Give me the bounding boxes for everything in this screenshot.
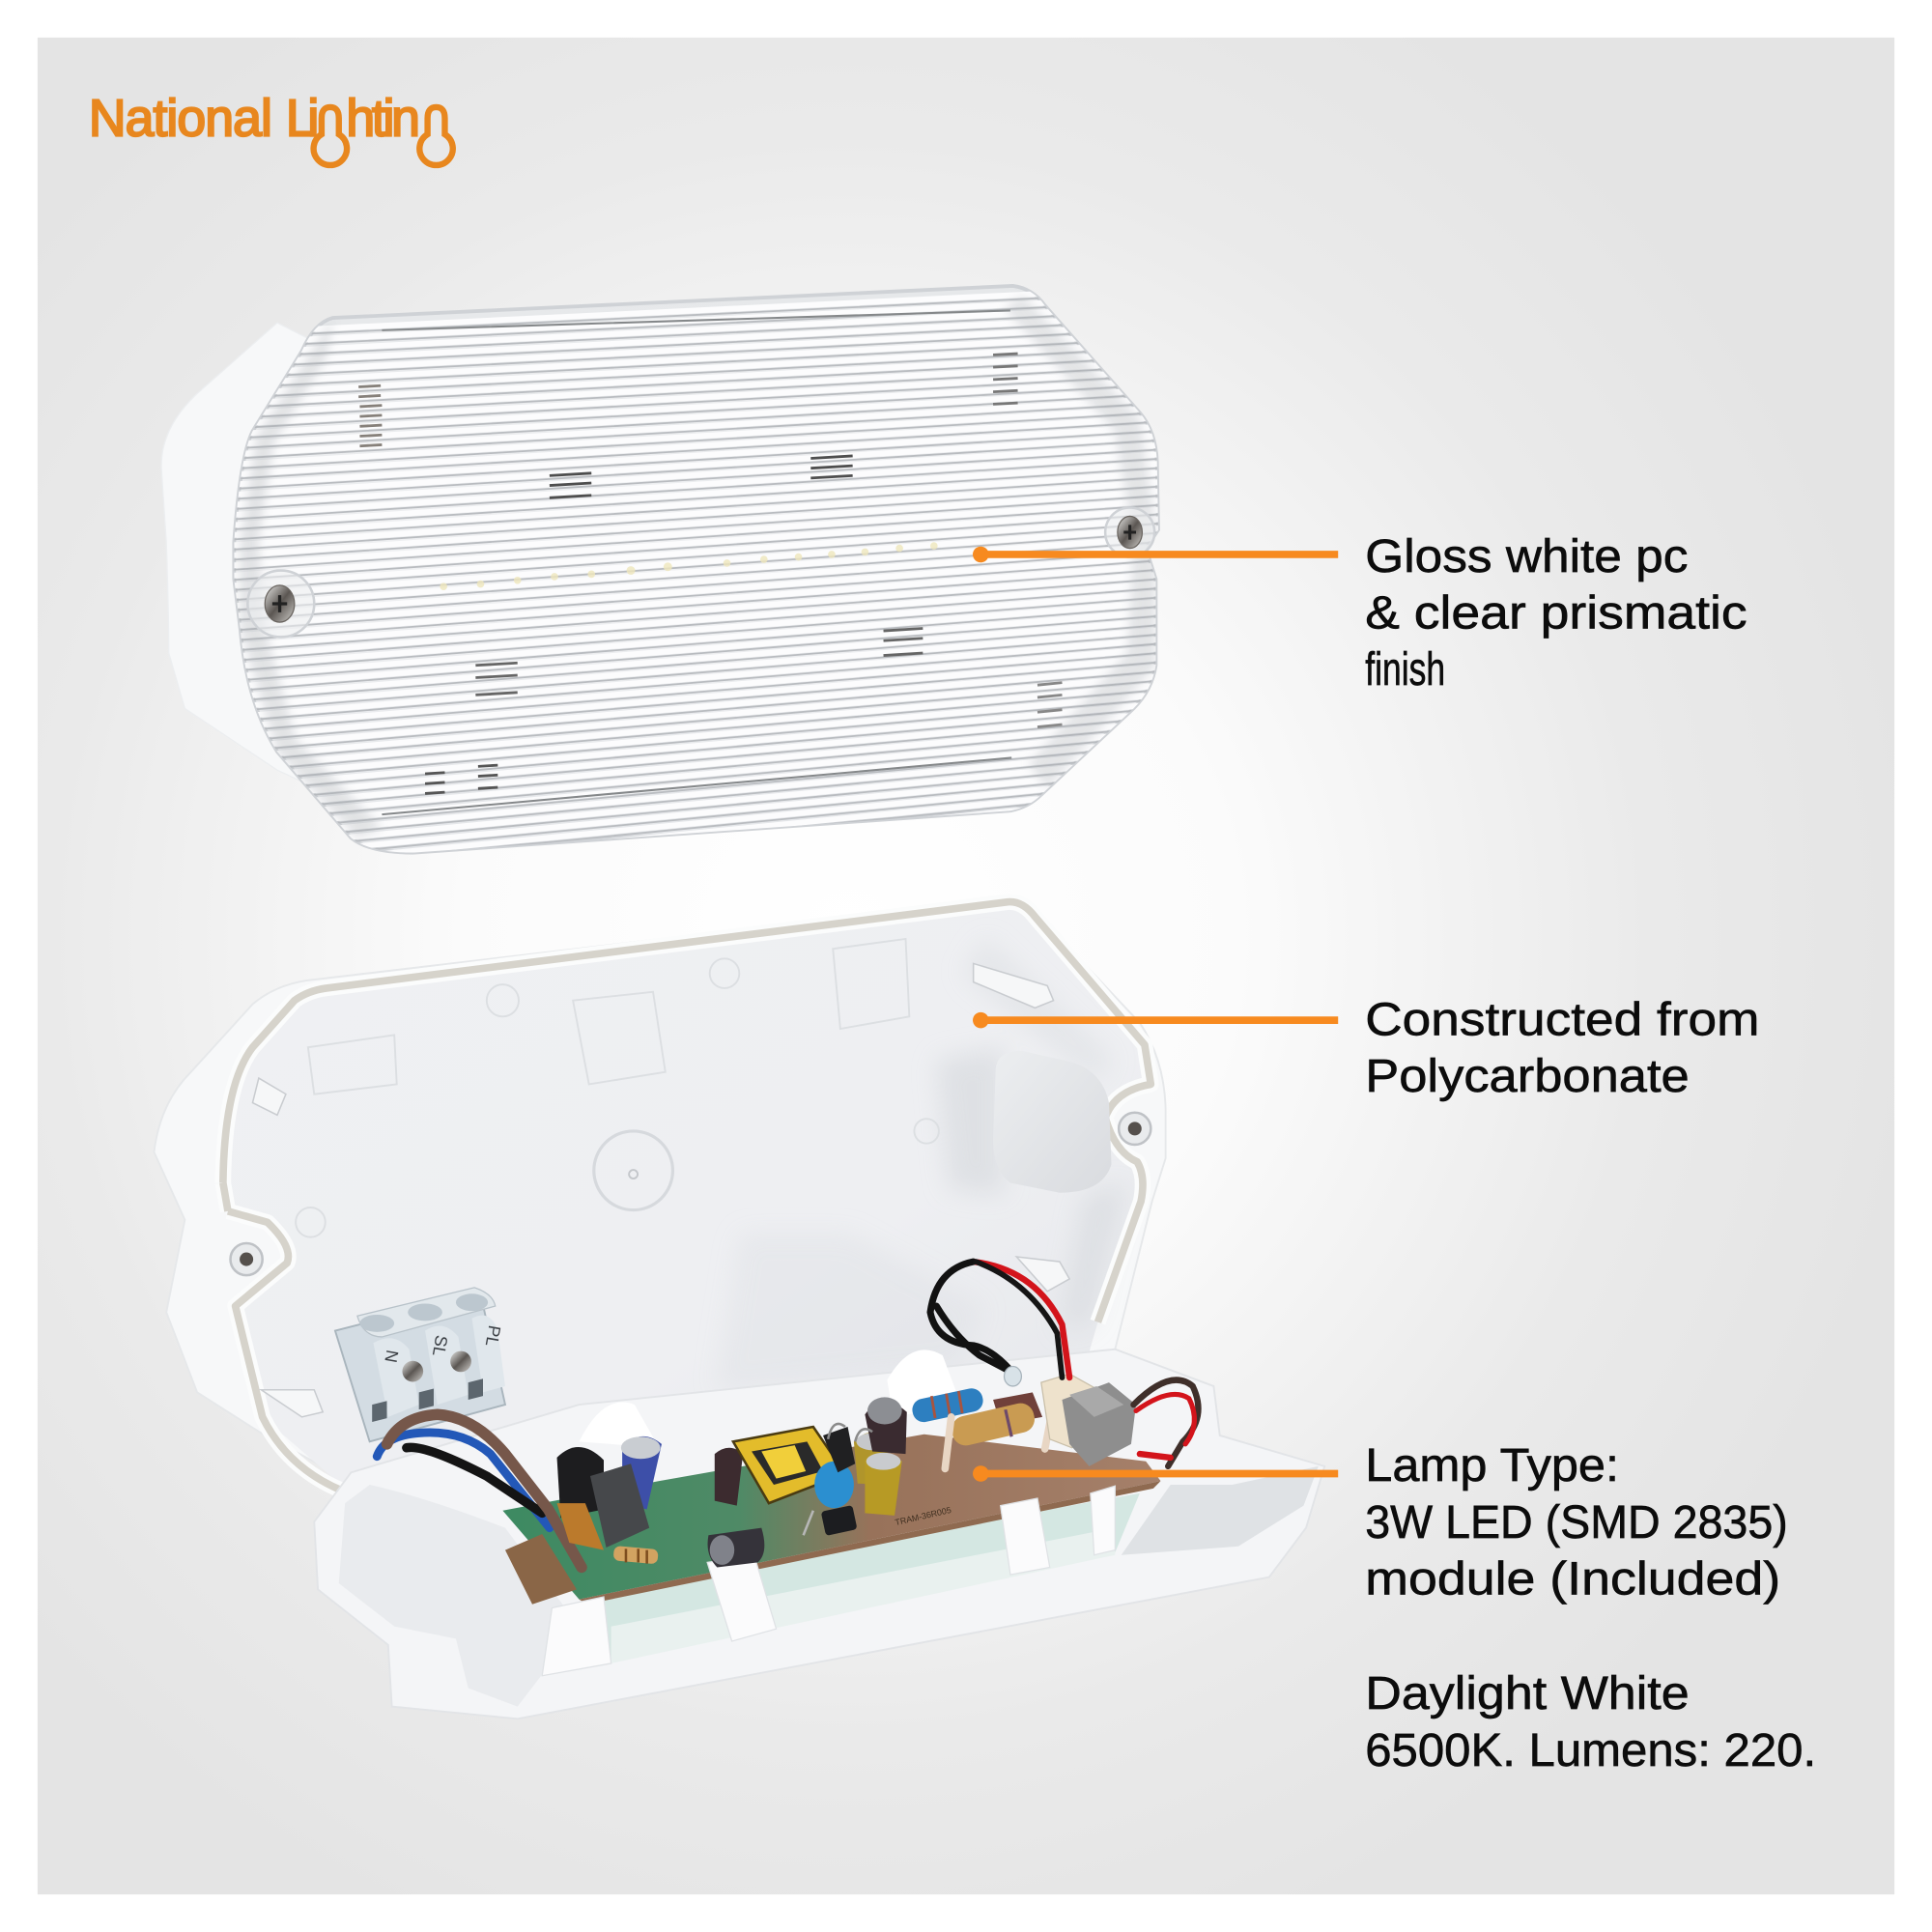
terminal block with PL SL N labels: N (381, 1349, 402, 1364)
capacitors and filter box (557, 1436, 662, 1550)
terminal block with PL SL N labels: PL (482, 1323, 504, 1349)
callout text: Constructed from (1365, 993, 1759, 1045)
left screw (247, 571, 314, 637)
blurred interior shading (715, 936, 1127, 1392)
moulded circular knockout (594, 1131, 672, 1210)
dark reflection dashes on lens (358, 354, 1062, 793)
callout text (1365, 530, 1747, 696)
callout text: Daylight White (1365, 1667, 1690, 1719)
product: closed lamp with prismatic lens (161, 286, 1164, 903)
retaining clips (252, 963, 1069, 1417)
logo: National Lighting: National (89, 90, 272, 147)
rear capacitor and diode loops (823, 1397, 907, 1472)
callout text: Lamp Type: (1365, 1439, 1619, 1492)
dark electrolytic capacitors (708, 1448, 764, 1567)
mint channel below PCB (591, 1493, 1140, 1663)
logo: National Lighting (89, 90, 453, 165)
callout text: 3W LED (SMD 2835) (1365, 1496, 1788, 1548)
moulded panels (296, 939, 939, 1237)
product: opened lamp base with circuit (154, 899, 1324, 1719)
base shell outer body (154, 899, 1166, 1552)
callout text: module (Included) (1365, 1553, 1780, 1605)
prismatic lens (234, 286, 1164, 903)
tray right pocket (1122, 1466, 1319, 1555)
callout text (1365, 993, 1759, 1102)
lamp housing behind lens (161, 323, 370, 813)
brown box capacitor (993, 1392, 1042, 1424)
mains wires: brown blue black (377, 1414, 582, 1567)
axial resistor green zone (613, 1546, 659, 1564)
tan wirewound resistor (949, 1401, 1037, 1448)
LED chips seen through lens (440, 542, 938, 590)
screw post right (1119, 1113, 1151, 1145)
sleeved leads (945, 1410, 1052, 1468)
callout text: Polycarbonate (1365, 1050, 1690, 1102)
tray clips over PCB (542, 1486, 1115, 1676)
gasket seal (223, 902, 1151, 1494)
callout: lamp type (973, 1439, 1816, 1776)
leader line (980, 552, 1338, 557)
interior floor of shell (220, 909, 1149, 1540)
tray walls (314, 1350, 1324, 1719)
callout text (1365, 1439, 1816, 1776)
callout text: & clear prismatic (1365, 587, 1747, 639)
blue resistor (910, 1386, 985, 1424)
blue disc capacitor and optocoupler (804, 1462, 857, 1536)
callout text: Gloss white pc (1365, 530, 1688, 582)
leader line (980, 1471, 1338, 1477)
terminal block with PL SL N labels (335, 1288, 505, 1441)
moulded boss block (993, 1051, 1112, 1193)
gold capacitors (854, 1433, 902, 1516)
callout: polycarbonate (973, 993, 1759, 1102)
logo: National Lighting: Li (286, 90, 319, 147)
translucent LED indicator (1005, 1367, 1021, 1386)
PCB legend: TRAM-36R005 (894, 1505, 952, 1527)
leader line (980, 1017, 1338, 1023)
edge shading of the lens (241, 318, 382, 838)
yellow transformer (733, 1427, 845, 1503)
tray left pocket (339, 1485, 579, 1707)
hinge arcs (579, 1350, 961, 1448)
callout text: 6500K. Lumens: 220. (1365, 1724, 1816, 1776)
callout text: finish (1365, 643, 1445, 696)
screw post left (231, 1243, 263, 1275)
printed circuit board (502, 1435, 1161, 1605)
LED wire connector (1041, 1374, 1136, 1466)
callout: gloss white pc (973, 530, 1747, 696)
terminal block with PL SL N labels: SL (429, 1334, 451, 1358)
right screw (1105, 508, 1154, 557)
logo: National Lighting: htin (346, 90, 420, 147)
black and red battery wires (930, 1262, 1198, 1466)
